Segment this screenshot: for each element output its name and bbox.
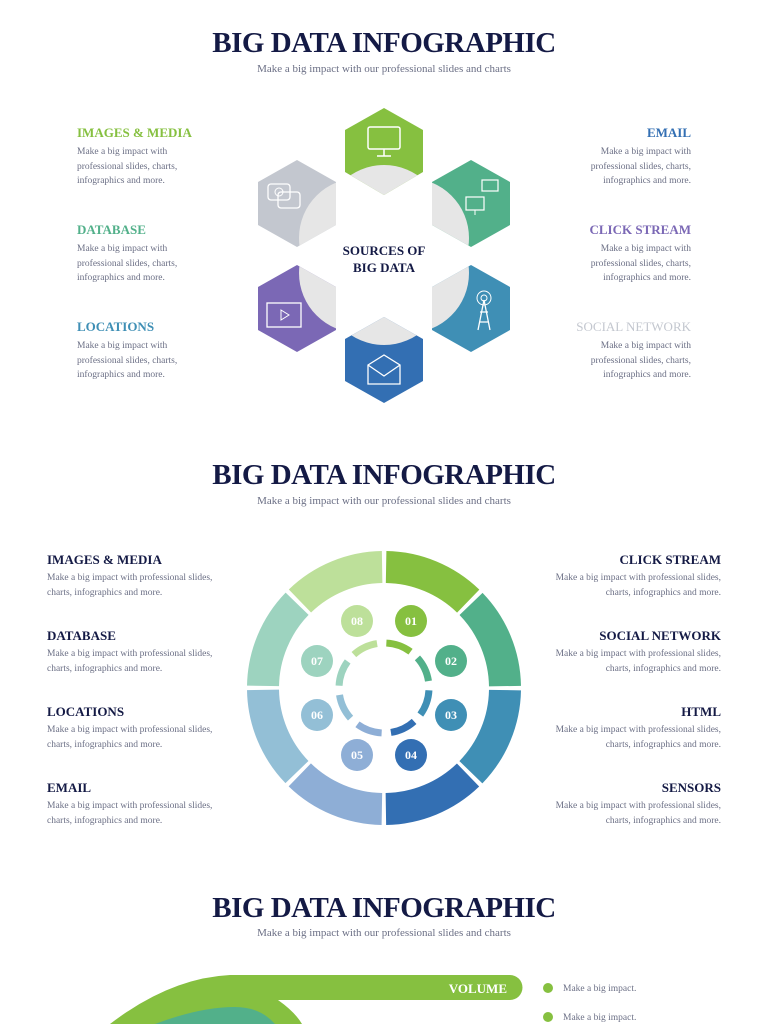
right list 2: Make a big impact with professional slides, — [556, 725, 721, 735]
volume diagram: Make a big impact. — [563, 984, 636, 994]
text: email: EMAIL — [647, 125, 691, 140]
text: images & media: infographics and more. — [77, 176, 165, 186]
text: images & media: professional slides, charts, — [77, 162, 177, 172]
donut chart — [247, 551, 521, 825]
text: locations: infographics and more. — [77, 370, 165, 380]
text: click stream: CLICK STREAM — [590, 222, 691, 237]
left list 2: Make a big impact with professional slides, — [47, 649, 212, 659]
right list 2: SOCIAL NETWORK — [599, 628, 721, 643]
text: email — [590, 125, 691, 186]
right list 2 — [556, 552, 721, 826]
text: social network: SOCIAL NETWORK — [576, 319, 691, 334]
text: locations: LOCATIONS — [77, 319, 154, 334]
text: images & media: IMAGES & MEDIA — [77, 125, 192, 140]
hex: locations — [258, 265, 336, 352]
text: click stream: Make a big impact with — [601, 244, 691, 254]
text: locations: professional slides, charts, — [77, 356, 177, 366]
title 2: BIG DATA INFOGRAPHIC — [212, 459, 556, 491]
volume diagram: Make a big impact. — [563, 1013, 636, 1023]
text: images & media — [77, 125, 192, 186]
title 1: BIG DATA INFOGRAPHIC — [212, 27, 556, 59]
volume diagram: VOLUME — [449, 981, 507, 996]
text: database: professional slides, charts, — [77, 258, 177, 268]
left list 2: charts, infographics and more. — [47, 816, 162, 826]
text: locations — [77, 319, 177, 380]
hex: email — [432, 160, 510, 247]
left list 2: charts, infographics and more. — [47, 588, 162, 598]
text: email: infographics and more. — [603, 176, 691, 186]
volume diagram — [110, 975, 636, 1024]
subtitle 3: Make a big impact with our professional slides and charts — [257, 927, 511, 939]
right list 2: Make a big impact with professional slides, — [556, 649, 721, 659]
text: database — [77, 222, 177, 283]
right list 2: Make a big impact with professional slides, — [556, 801, 721, 811]
text: social network: Make a big impact with — [601, 341, 691, 351]
right list 2: charts, infographics and more. — [606, 664, 721, 674]
left list 2: Make a big impact with professional slides, — [47, 725, 212, 735]
right list 2: SENSORS — [662, 780, 721, 795]
right list 2: HTML — [681, 704, 721, 719]
text: social network: infographics and more. — [603, 370, 691, 380]
subtitle 1: Make a big impact with our professional slides and charts — [257, 63, 511, 75]
text: locations: Make a big impact with — [77, 341, 167, 351]
left list 2: EMAIL — [47, 780, 91, 795]
donut chart: 01 — [405, 614, 417, 628]
hexagon diagram: BIG DATA — [353, 260, 416, 275]
hex: social — [345, 317, 423, 403]
right list 2: charts, infographics and more. — [606, 740, 721, 750]
hex: database — [258, 160, 336, 247]
center label: SOURCES OF — [343, 243, 425, 258]
text: click stream — [590, 222, 691, 283]
donut chart: 04 — [405, 748, 417, 762]
left list 2: charts, infographics and more. — [47, 740, 162, 750]
subtitle 2: Make a big impact with our professional slides and charts — [257, 495, 511, 507]
donut chart: 06 — [311, 708, 323, 722]
donut chart: 03 — [445, 708, 457, 722]
hex: click stream — [432, 265, 510, 352]
text: database: infographics and more. — [77, 273, 165, 283]
left list 2 — [47, 552, 212, 826]
text: email: Make a big impact with — [601, 147, 691, 157]
text: database: DATABASE — [77, 222, 146, 237]
text: click stream: professional slides, charts, — [591, 258, 691, 268]
title 3: BIG DATA INFOGRAPHIC — [212, 892, 556, 924]
left list 2: DATABASE — [47, 628, 116, 643]
text: database: Make a big impact with — [77, 244, 167, 254]
left list 2: LOCATIONS — [47, 704, 124, 719]
donut chart: 02 — [445, 654, 457, 668]
left list 2: IMAGES & MEDIA — [47, 552, 162, 567]
left list 2: charts, infographics and more. — [47, 664, 162, 674]
text: email: professional slides, charts, — [591, 162, 691, 172]
right list 2: Make a big impact with professional slides, — [556, 573, 721, 583]
text: click stream: infographics and more. — [603, 273, 691, 283]
hex: images — [345, 108, 423, 195]
right list 2: charts, infographics and more. — [606, 588, 721, 598]
text: social network: professional slides, charts, — [591, 356, 691, 366]
donut chart: 05 — [351, 748, 363, 762]
donut chart: 07 — [311, 654, 323, 668]
right list 2: charts, infographics and more. — [606, 816, 721, 826]
right list 2: CLICK STREAM — [620, 552, 721, 567]
hexagon diagram — [258, 108, 510, 403]
donut chart: 08 — [351, 614, 363, 628]
text: images & media: Make a big impact with — [77, 147, 167, 157]
left list 2: Make a big impact with professional slides, — [47, 573, 212, 583]
text: social network — [576, 319, 691, 380]
left list 2: Make a big impact with professional slides, — [47, 801, 212, 811]
